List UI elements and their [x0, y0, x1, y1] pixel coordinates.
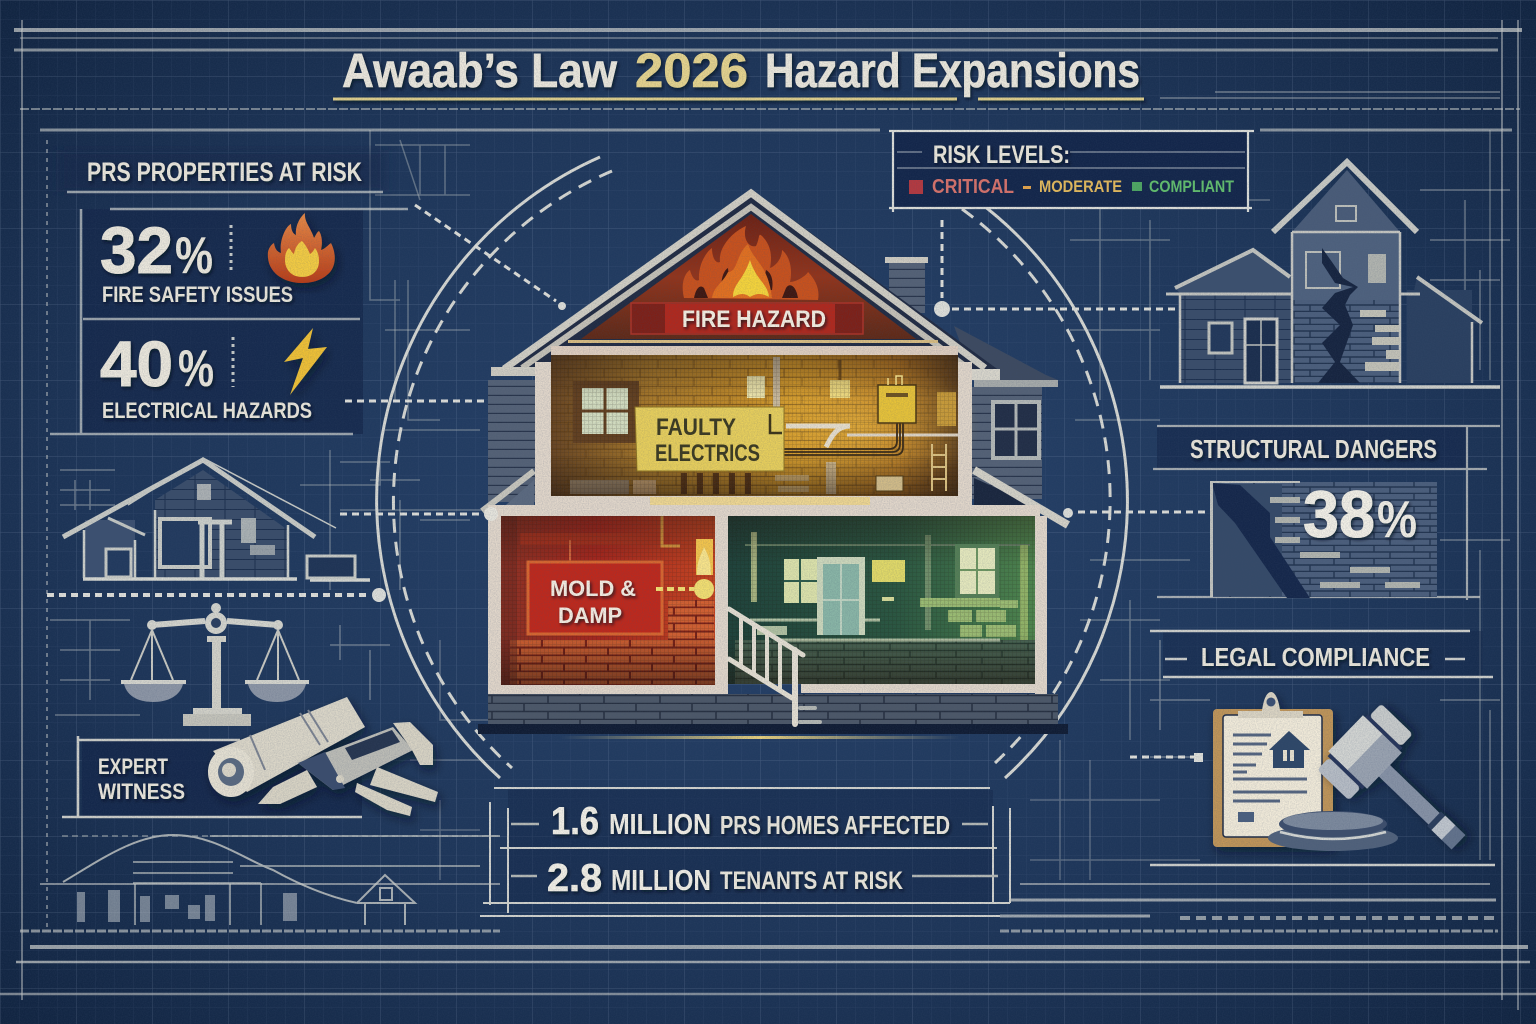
wiring and meter: [784, 376, 958, 491]
green bricks: [920, 598, 1018, 637]
flame box: [696, 539, 713, 575]
title: Hazard Expansions: [765, 45, 1140, 98]
cutaway house: [478, 189, 1073, 739]
title: 2026: [635, 45, 748, 98]
stat: 32% fire safety issues: [100, 213, 293, 307]
window: [784, 559, 817, 603]
gable roof: [491, 189, 1000, 380]
lamps: [747, 360, 850, 398]
icon: lightning bolt: [284, 328, 327, 395]
stat: 2.8 million tenants at risk: [547, 857, 903, 900]
icon: gavel: [1314, 700, 1490, 875]
stat: 32% fire safety issues: FIRE SAFETY ISSUES: [102, 282, 293, 307]
right window: [955, 544, 999, 598]
panel: PRS properties at risk: [50, 150, 408, 434]
connector lines: [47, 205, 1236, 762]
label: expert witness: EXPERT: [98, 754, 168, 779]
stat: 2.8 million tenants at risk: TENANTS AT RISK: [720, 867, 903, 895]
stat: 40% electrical hazards: ELECTRICAL HAZARDS: [102, 398, 312, 423]
dot: lower right connector: [1063, 508, 1073, 518]
icon: clipboard: [1213, 692, 1333, 847]
attic: fire hazard: [581, 214, 916, 339]
panel: headline statistics: [480, 788, 1010, 916]
dot: lower left connector: [484, 507, 498, 521]
banner: fire hazard: [631, 303, 863, 334]
stat: 32% fire safety issues: %: [175, 227, 213, 285]
stat: 1.6 million PRS homes affected: MILLION: [609, 809, 711, 841]
stat: 38%: 38: [1303, 477, 1375, 551]
legend: critical: CRITICAL: [932, 176, 1014, 198]
banner: fire hazard: FIRE HAZARD: [682, 306, 826, 333]
stat: 40% electrical hazards: [100, 328, 312, 423]
stat: 38%: [1303, 477, 1417, 551]
door: [817, 557, 865, 635]
label: faulty electrics: ELECTRICS: [655, 440, 760, 467]
title: Awaab’s Law: [342, 45, 618, 98]
label: mold and damp: MOLD &: [550, 576, 636, 601]
stat: 38%: %: [1377, 491, 1417, 549]
stat: 1.6 million PRS homes affected: [551, 800, 950, 843]
lower floor left: mold and damp: [501, 516, 715, 685]
blueprint: lower left site plan: [62, 835, 500, 925]
label: faulty electrics: [635, 407, 784, 471]
image: cracked wall: [1210, 482, 1437, 598]
label: mold and damp: [528, 562, 662, 634]
stat: 2.8 million tenants at risk: 2.8: [547, 857, 602, 900]
stat: 32% fire safety issues: 32: [100, 213, 173, 287]
label: mold and damp: DAMP: [558, 603, 622, 628]
stat: 1.6 million PRS homes affected: 1.6: [551, 800, 599, 843]
panel: legal compliance: [1150, 631, 1495, 875]
heading: PRS properties at risk: PRS PROPERTIES AT RISK: [87, 157, 362, 187]
blueprint: cracked house: [1160, 162, 1500, 387]
legend: compliant: COMPLIANT: [1149, 178, 1234, 196]
panel: expert witness: [62, 697, 438, 817]
left siding: [488, 380, 535, 502]
window: [573, 381, 639, 443]
flames: [683, 226, 819, 300]
panel: structural dangers: [1153, 426, 1500, 600]
label: expert witness: [98, 754, 185, 804]
label: expert witness: WITNESS: [98, 779, 185, 804]
icon: rolled plans: [208, 697, 365, 797]
stat: 40% electrical hazards: %: [178, 340, 214, 398]
heading: structural dangers: STRUCTURAL DANGERS: [1190, 436, 1437, 464]
blueprint circle: [377, 157, 1127, 778]
lower roof: [482, 470, 1068, 525]
ceiling: [551, 340, 958, 355]
lower floor right: green compliant room: [728, 516, 1035, 684]
house frame: [488, 362, 1047, 694]
legend: moderate: MODERATE: [1039, 178, 1122, 196]
upper floor: electrics: [551, 355, 980, 496]
right wing: [954, 326, 1058, 499]
title: [333, 45, 1144, 99]
heading: risk levels: RISK LEVELS:: [933, 141, 1070, 169]
icon: gavel block: [1268, 811, 1398, 851]
stairs: [729, 609, 820, 724]
heading: legal compliance: LEGAL COMPLIANCE: [1201, 644, 1430, 672]
stat: 40% electrical hazards: 40: [100, 328, 173, 400]
icon: flame: [268, 213, 335, 283]
foundation: [478, 694, 1068, 739]
icon: scales of justice: [121, 603, 309, 726]
stat: 2.8 million tenants at risk: MILLION: [611, 865, 711, 897]
blueprint house: left: [63, 458, 370, 580]
chimney: [885, 257, 928, 313]
icon: calipers: [258, 722, 438, 816]
panel: risk levels legend: [889, 131, 1254, 212]
label: faulty electrics: FAULTY: [656, 414, 736, 441]
stat: 1.6 million PRS homes affected: PRS HOMES AFFECTED: [720, 810, 950, 840]
